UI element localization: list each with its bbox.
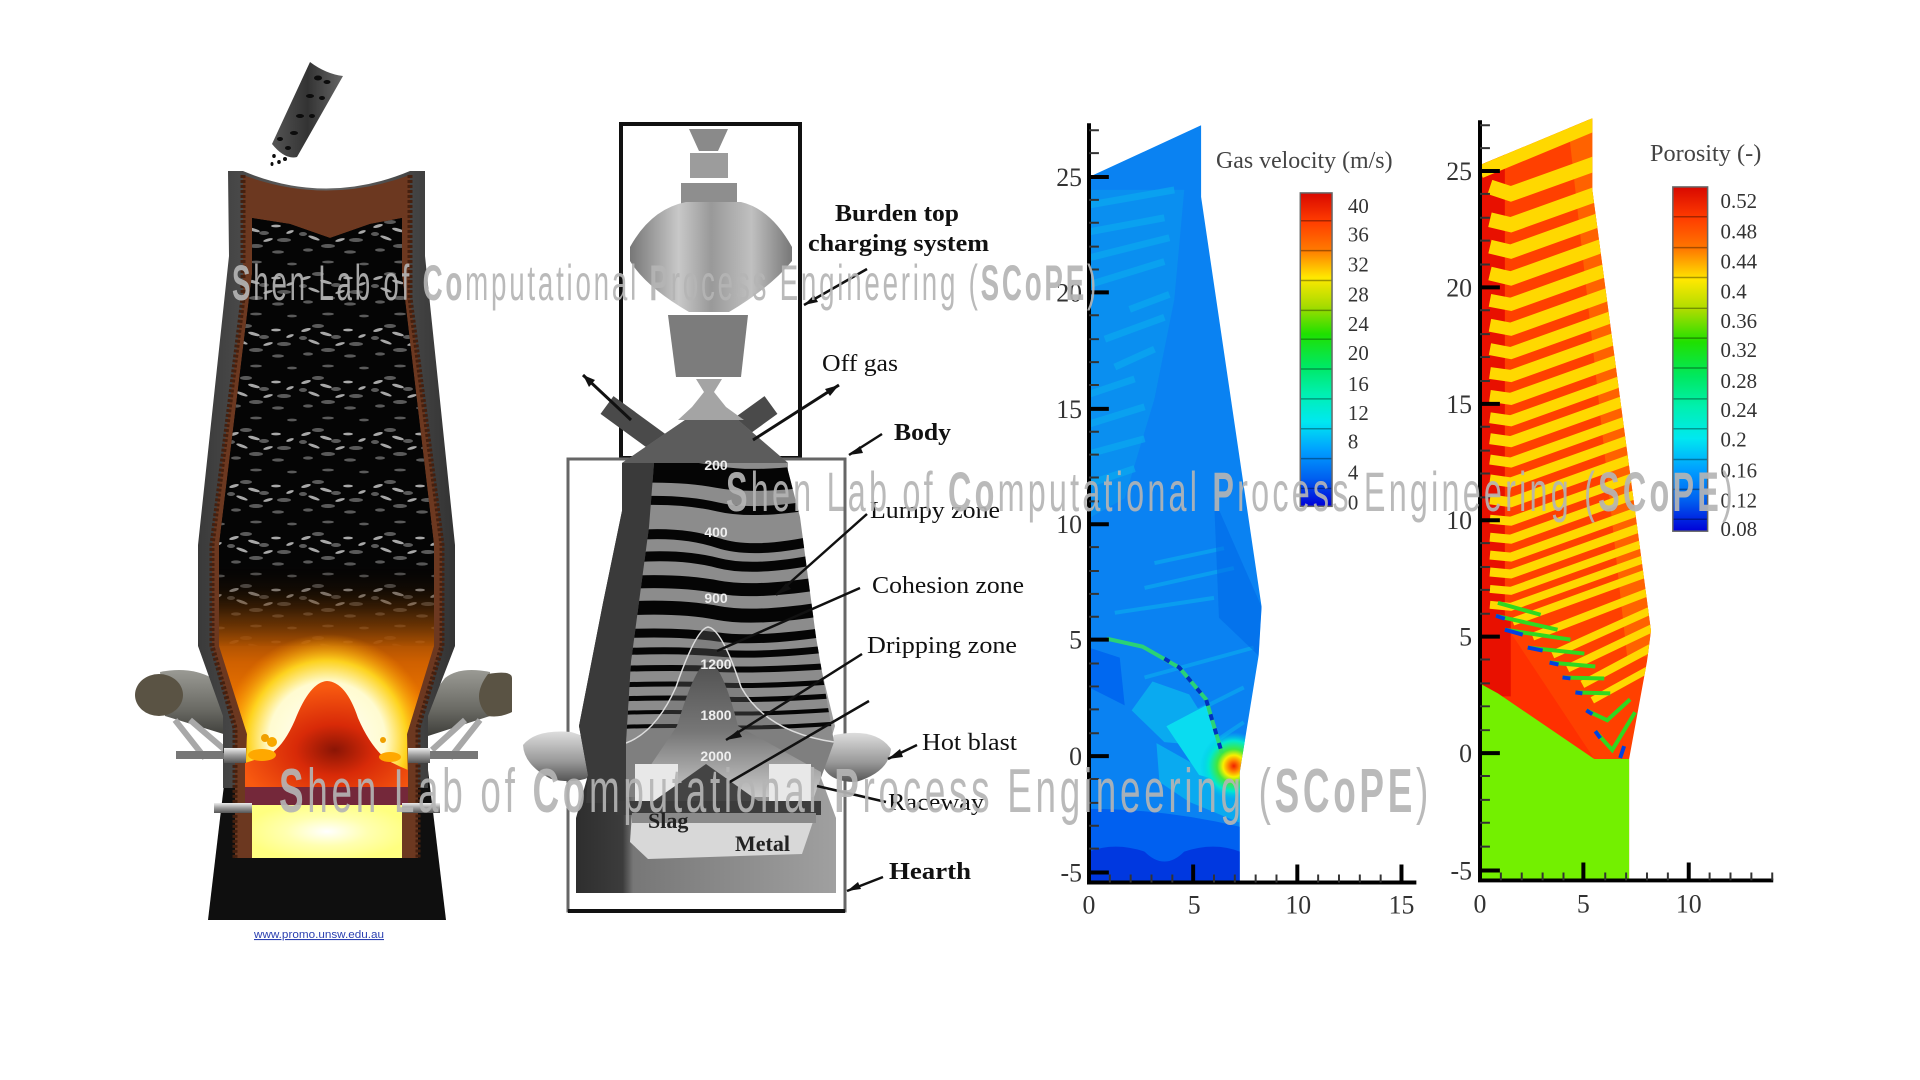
colour legend: 24	[1348, 312, 1369, 336]
coke base	[1478, 682, 1632, 885]
axis numbers: 5	[1577, 889, 1590, 918]
panel: labelled furnace schematic	[523, 124, 1024, 911]
callout labels: Cohesion zone	[872, 573, 1024, 599]
body box	[568, 459, 845, 911]
furnace hearth base	[208, 768, 446, 920]
callout labels: Burden top	[835, 201, 959, 227]
callout labels	[808, 201, 1024, 885]
slag and metal pool	[630, 813, 816, 859]
colour legend: 0.2	[1721, 428, 1747, 452]
temperature labels: 2000	[700, 748, 732, 764]
colour legend: 28	[1348, 282, 1369, 306]
colour legend: 0.08	[1721, 517, 1757, 541]
axes and ticks	[1089, 123, 1416, 882]
colour legend: 0.32	[1721, 338, 1757, 362]
axis numbers: -5	[1061, 858, 1082, 887]
watermark: first line: Shen Lab of Computational Process Engineering (SCoPE)	[232, 255, 1099, 311]
tuyere pipe right	[418, 670, 512, 758]
temperature labels: 900	[704, 590, 728, 606]
colour legend: 20	[1348, 341, 1369, 365]
colour legend: 16	[1348, 372, 1369, 396]
axis numbers: 0	[1083, 890, 1095, 919]
burden top box	[621, 124, 800, 458]
arrowheads	[583, 295, 903, 891]
callout labels: Off gas	[822, 351, 898, 377]
zones interior with burden layers	[626, 463, 834, 797]
molten metal pool	[252, 805, 402, 858]
furnace steel shell	[198, 171, 455, 788]
raceway mound	[245, 681, 408, 787]
colour legend: 0.24	[1721, 398, 1758, 422]
colour legend: 36	[1348, 223, 1369, 247]
red lower wedge	[1503, 634, 1594, 758]
panel: blast furnace cross-section illustration	[135, 62, 512, 941]
legend title: Porosity (-)	[1650, 141, 1761, 167]
refractory brick lining	[212, 175, 442, 858]
watermark: third line: Shen Lab of Computational Process Engineering (SCoPE)	[279, 757, 1432, 826]
axis numbers: 10	[1676, 889, 1702, 918]
temperature labels: 1200	[700, 656, 732, 672]
colour legend: 12	[1348, 401, 1369, 425]
tuyere nozzles and tap tubes	[176, 748, 478, 813]
legend title: Gas velocity (m/s)	[1216, 148, 1393, 174]
colour legend: 0.44	[1721, 250, 1758, 274]
watermark: second line: Shen Lab of Computational Process Engineering (SCoPE)	[726, 460, 1736, 523]
axis numbers: 15	[1056, 395, 1082, 424]
colour legend: 32	[1348, 252, 1369, 277]
axes and ticks	[1480, 120, 1773, 880]
slag layer	[245, 787, 408, 805]
hearth labels: Metal	[735, 831, 790, 856]
axis numbers: 0	[1069, 742, 1082, 771]
callout labels: Raceway	[888, 790, 984, 816]
axis numbers	[1056, 163, 1414, 919]
axis numbers: 10	[1056, 510, 1082, 539]
colour legend: 8	[1348, 430, 1358, 454]
temperature labels: 200	[704, 457, 728, 473]
cohesive zone layers	[1496, 603, 1635, 758]
tuyere pipe left	[135, 670, 240, 758]
callout labels: Body	[894, 420, 951, 446]
furnace floor	[616, 801, 821, 815]
axis numbers: 10	[1285, 890, 1311, 919]
colour legend: 0.52	[1721, 189, 1757, 213]
axis numbers: 0	[1474, 889, 1486, 918]
axis numbers: 5	[1188, 890, 1201, 919]
colour legend: 40	[1348, 194, 1369, 218]
callout labels: Hearth	[889, 859, 971, 885]
callout labels: Hot blast	[922, 730, 1017, 756]
axis numbers: 10	[1446, 506, 1472, 535]
central coke core	[651, 764, 761, 803]
dark left shell	[579, 463, 654, 803]
callout labels: charging system	[808, 231, 989, 257]
colour legend	[1673, 187, 1758, 541]
chart: porosity contour	[1446, 91, 1773, 918]
colour legend	[1300, 193, 1369, 514]
colour legend: 0.36	[1721, 309, 1757, 333]
callout arrows	[583, 269, 917, 891]
hot blast bustle rings	[523, 732, 891, 782]
temperature labels: 1800	[700, 707, 732, 723]
colour legend: 0.12	[1721, 488, 1757, 512]
porosity field	[1482, 118, 1651, 878]
icon: charging skip with falling coke	[270, 62, 343, 166]
hearth labels: Slag	[648, 808, 688, 833]
axis numbers: 15	[1446, 390, 1472, 419]
colour legend: 0	[1348, 490, 1358, 514]
temperature labels: 400	[704, 524, 728, 540]
charging equipment	[630, 129, 792, 420]
colour legend: 0.48	[1721, 220, 1757, 244]
axis numbers: 5	[1459, 623, 1472, 652]
axis numbers	[1446, 157, 1702, 918]
chart: gas velocity contour	[1056, 120, 1416, 919]
axis numbers: -5	[1451, 856, 1472, 885]
colour legend: 0.16	[1721, 458, 1757, 482]
top cone	[622, 420, 788, 463]
raceway windows	[635, 764, 811, 804]
axis numbers: 5	[1069, 626, 1082, 655]
off-gas pipes	[607, 405, 771, 459]
velocity field	[1091, 125, 1262, 880]
callout labels: Dripping zone	[867, 633, 1017, 659]
furnace interior: burden and flame gradient	[219, 218, 434, 787]
hearth labels	[648, 808, 790, 856]
callout labels: Lumpy zone	[870, 498, 1000, 524]
cohesive zone ridge	[1107, 639, 1222, 753]
colour legend: 4	[1348, 460, 1359, 484]
source caption: www.promo.unsw.edu.au	[253, 929, 384, 941]
colour legend: 0.4	[1721, 279, 1747, 303]
temperature labels	[700, 457, 732, 764]
axis numbers: 0	[1459, 739, 1472, 768]
axis numbers: 25	[1446, 157, 1472, 186]
axis numbers: 20	[1056, 278, 1082, 307]
colour legend: 0.28	[1721, 369, 1757, 393]
axis numbers: 20	[1446, 273, 1472, 302]
axis numbers: 25	[1056, 163, 1082, 192]
furnace body	[576, 420, 836, 893]
axis numbers: 15	[1389, 890, 1414, 919]
